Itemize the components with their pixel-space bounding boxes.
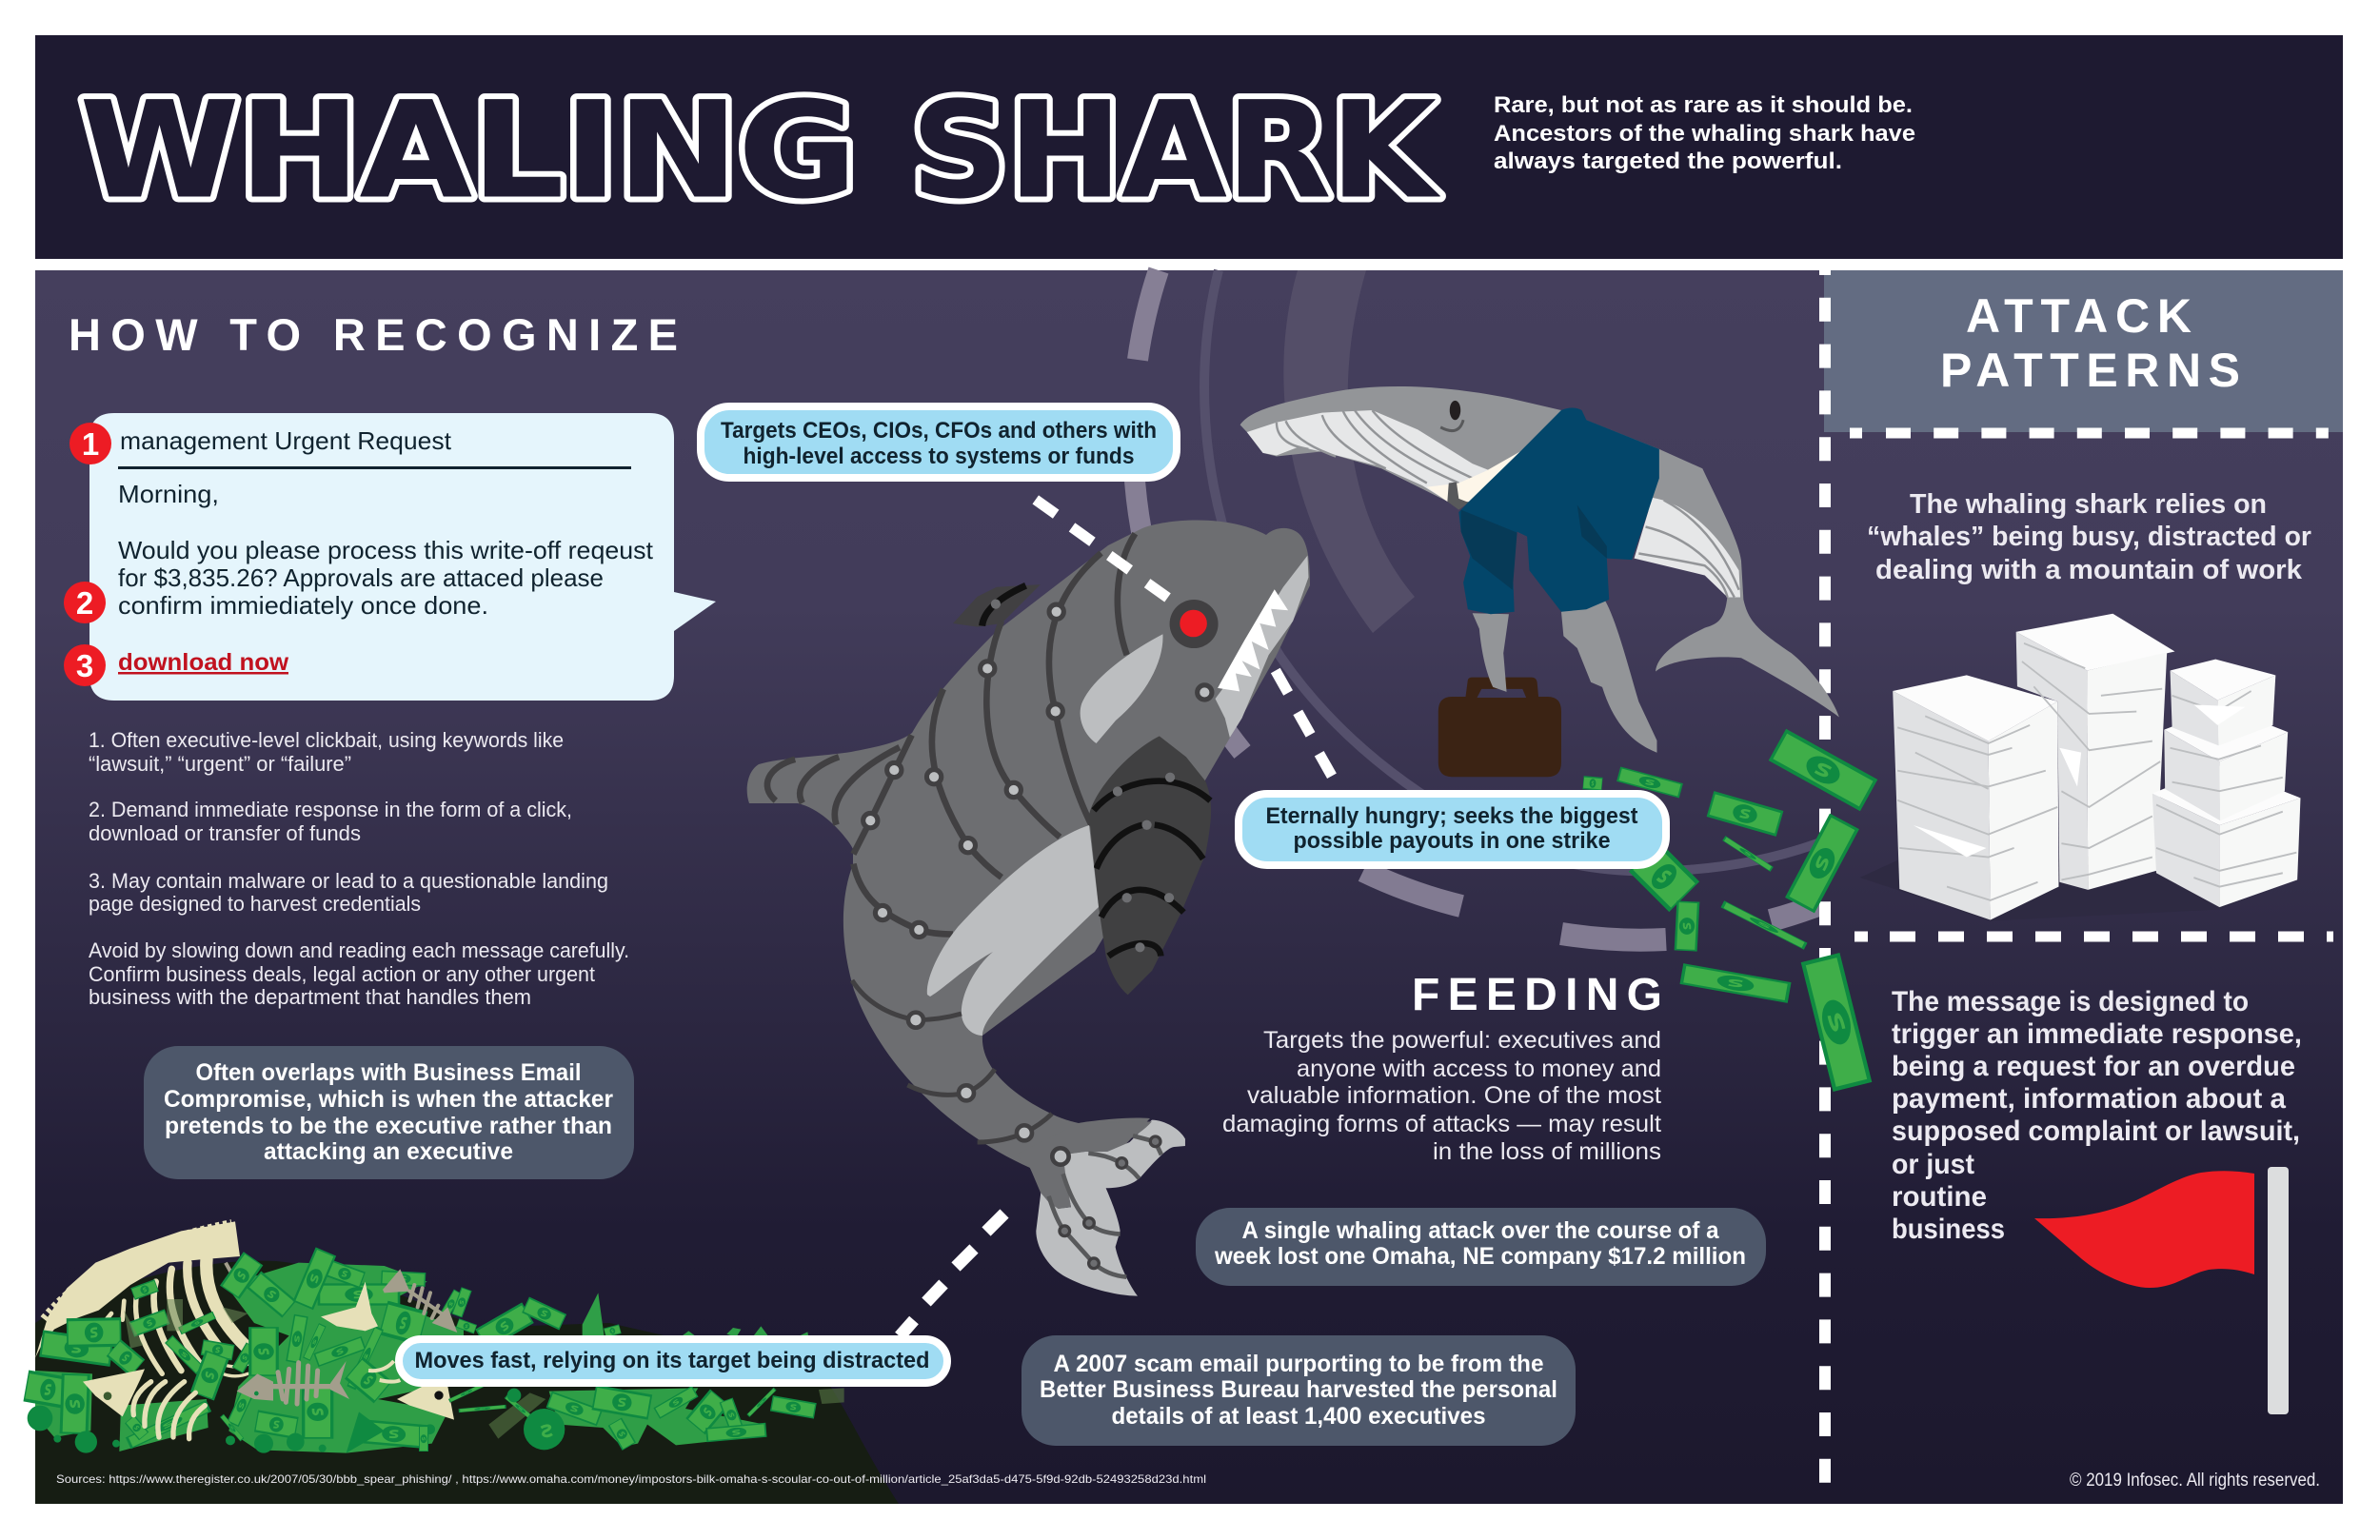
callout: moves fast: [399, 1339, 947, 1383]
illustration: shark: [747, 520, 1310, 1296]
stat box: Omaha company: A single whaling attack over the course of a: [1241, 1217, 1720, 1244]
number badges: [64, 423, 111, 686]
header band: [35, 35, 2343, 259]
recognition list: page designed to harvest credentials: [89, 892, 421, 916]
callout: targets CEOs: [701, 406, 1177, 478]
callout: targets CEOs: Targets CEOs, CIOs, CFOs and others with: [721, 418, 1157, 444]
email speech bubble: download now: [118, 649, 289, 676]
stat box: Omaha company: [1196, 1208, 1766, 1286]
feeding description: Targets the powerful: executives and: [1263, 1027, 1661, 1054]
text: message designed to trigger response: business: [1892, 1214, 2005, 1245]
number badges: 1: [82, 426, 99, 462]
subtitle: [1494, 92, 1915, 174]
cream fish left: [83, 1369, 205, 1439]
stat box: 2007 scam: Better Business Bureau harvested the personal: [1040, 1376, 1557, 1403]
attack patterns header panel: [1824, 270, 2343, 432]
number badges: 2: [76, 585, 93, 621]
callout: moves fast: Moves fast, relying on its target being distracted: [415, 1348, 929, 1373]
text: message designed to trigger response: supposed complaint or lawsuit,: [1892, 1116, 2300, 1147]
text: whales being busy: The whaling shark relies on: [1910, 489, 2267, 520]
recognition list: 1. Often executive-level clickbait, using keywords like: [89, 728, 564, 752]
recognition list: Avoid by slowing down and reading each message carefully.: [89, 938, 629, 962]
feeding description: valuable information. One of the most: [1247, 1082, 1661, 1109]
text: message designed to trigger response: [1892, 986, 2302, 1245]
feeding description: [1222, 1027, 1661, 1165]
callout: business email compromise: [144, 1046, 634, 1179]
feeding description: in the loss of millions: [1433, 1138, 1661, 1165]
heading: attack patterns: [1940, 289, 2240, 397]
recognition list: 3. May contain malware or lead to a questionable landing: [89, 869, 608, 893]
email speech bubble: [89, 413, 716, 701]
callout: targets CEOs: high-level access to systems or funds: [743, 444, 1135, 469]
main panel background: [35, 270, 2343, 1504]
big fish skeleton: [35, 1221, 273, 1376]
title: WHALING: [80, 73, 857, 227]
callout: business email compromise: pretends to be the executive rather than: [165, 1113, 612, 1139]
title: SHARK: [911, 73, 1439, 227]
illustration: whale in a suit: [1240, 386, 1839, 777]
green mass under bills: [35, 1263, 464, 1453]
text: whales being busy: [1867, 489, 2311, 585]
feeding description: damaging forms of attacks — may result: [1222, 1111, 1661, 1137]
cream fish right: [368, 1361, 454, 1420]
shark upper details: [767, 534, 1308, 995]
cream fish upper: [321, 1282, 378, 1331]
ground and money pile with skeletons: [23, 1221, 899, 1504]
icon: briefcase: [1438, 678, 1561, 777]
email speech bubble: Would you please process this write-off reqeust: [118, 536, 654, 564]
sources: Sources: https://www.theregister.co.uk/2007/05/30/bbb_spear_phishing/ , https://www.omaha.com/money/impostors-bilk-omaha-s-scoular-co-out-of-million/article_25af3da5-d475-5f9d-92db-52493258d23d.html: [56, 1472, 1206, 1486]
money bills in pile: [23, 1247, 462, 1453]
recognition list: business with the department that handles them: [89, 985, 531, 1009]
subtitle: always targeted the powerful.: [1494, 148, 1842, 174]
text: message designed to trigger response: routine: [1892, 1181, 1987, 1213]
copyright: © 2019 Infosec. All rights reserved.: [2070, 1471, 2320, 1491]
subtitle: Rare, but not as rare as it should be.: [1494, 92, 1913, 118]
shark tail details: [852, 980, 1185, 1296]
email speech bubble: management Urgent Request: [120, 426, 452, 455]
stat box: 2007 scam: [1021, 1335, 1576, 1446]
text: whales being busy: “whales” being busy, distracted or: [1867, 522, 2311, 552]
feeding description: anyone with access to money and: [1297, 1056, 1661, 1082]
number badges: 3: [76, 648, 93, 683]
dashed connectors: [900, 500, 1332, 1336]
shark eye: [1170, 600, 1219, 648]
background rings: [1135, 270, 1820, 940]
heading: attack patterns: PATTERNS: [1940, 344, 2240, 397]
title: WHALING: [80, 73, 857, 227]
text: message designed to trigger response: trigger an immediate response,: [1892, 1018, 2302, 1050]
text: whales being busy: dealing with a mountain of work: [1875, 555, 2303, 585]
heading: feeding: FEEDING: [1412, 970, 1662, 1020]
icon: red flag: [2034, 1167, 2289, 1414]
heading: attack patterns: ATTACK: [1966, 289, 2192, 343]
email speech bubble: for $3,835.26? Approvals are attaced please: [118, 563, 604, 592]
grey fish upper: [383, 1269, 457, 1333]
stat box: 2007 scam: details of at least 1,400 executives: [1112, 1403, 1485, 1430]
stat box: 2007 scam: A 2007 scam email purporting to be from the: [1053, 1351, 1544, 1377]
callout: business email compromise: attacking an executive: [264, 1138, 513, 1165]
money falling: [1582, 729, 1877, 1092]
text: message designed to trigger response: being a request for an overdue: [1892, 1051, 2295, 1082]
text: message designed to trigger response: or just: [1892, 1149, 1974, 1180]
subtitle: Ancestors of the whaling shark have: [1494, 121, 1915, 147]
recognition list: [89, 728, 629, 1009]
callout: business email compromise: Compromise, which is when the attacker: [164, 1086, 613, 1113]
text: message designed to trigger response: The message is designed to: [1892, 986, 2249, 1017]
callout: eternally hungry: Eternally hungry; seeks the biggest: [1266, 803, 1637, 829]
callout: business email compromise: Often overlaps with Business Email: [196, 1059, 581, 1086]
recognition list: Confirm business deals, legal action or any other urgent: [89, 962, 595, 986]
heading: how to recognize: HOW TO RECOGNIZE: [69, 309, 678, 360]
callout: eternally hungry: [1239, 794, 1666, 865]
email speech bubble: confirm immiediately once done.: [118, 591, 488, 620]
grey fish middle: [237, 1361, 349, 1404]
attack patterns dashed dividers: [1825, 270, 2333, 1504]
text: message designed to trigger response: payment, information about a: [1892, 1083, 2286, 1115]
recognition list: 2. Demand immediate response in the form of a click,: [89, 798, 572, 821]
icon: paper stacks: [1860, 614, 2300, 920]
recognition list: download or transfer of funds: [89, 821, 361, 845]
right part of pile: [419, 1287, 844, 1451]
shark belly fin: [927, 825, 1099, 1036]
stat box: Omaha company: week lost one Omaha, NE company $17.2 million: [1214, 1243, 1746, 1270]
title: [80, 73, 1439, 227]
callout: eternally hungry: possible payouts in one strike: [1293, 828, 1611, 854]
title: SHARK: [911, 73, 1439, 227]
left part of pile: [23, 1221, 464, 1453]
recognition list: “lawsuit,” “urgent” or “failure”: [89, 752, 351, 776]
email speech bubble: Morning,: [118, 480, 219, 508]
